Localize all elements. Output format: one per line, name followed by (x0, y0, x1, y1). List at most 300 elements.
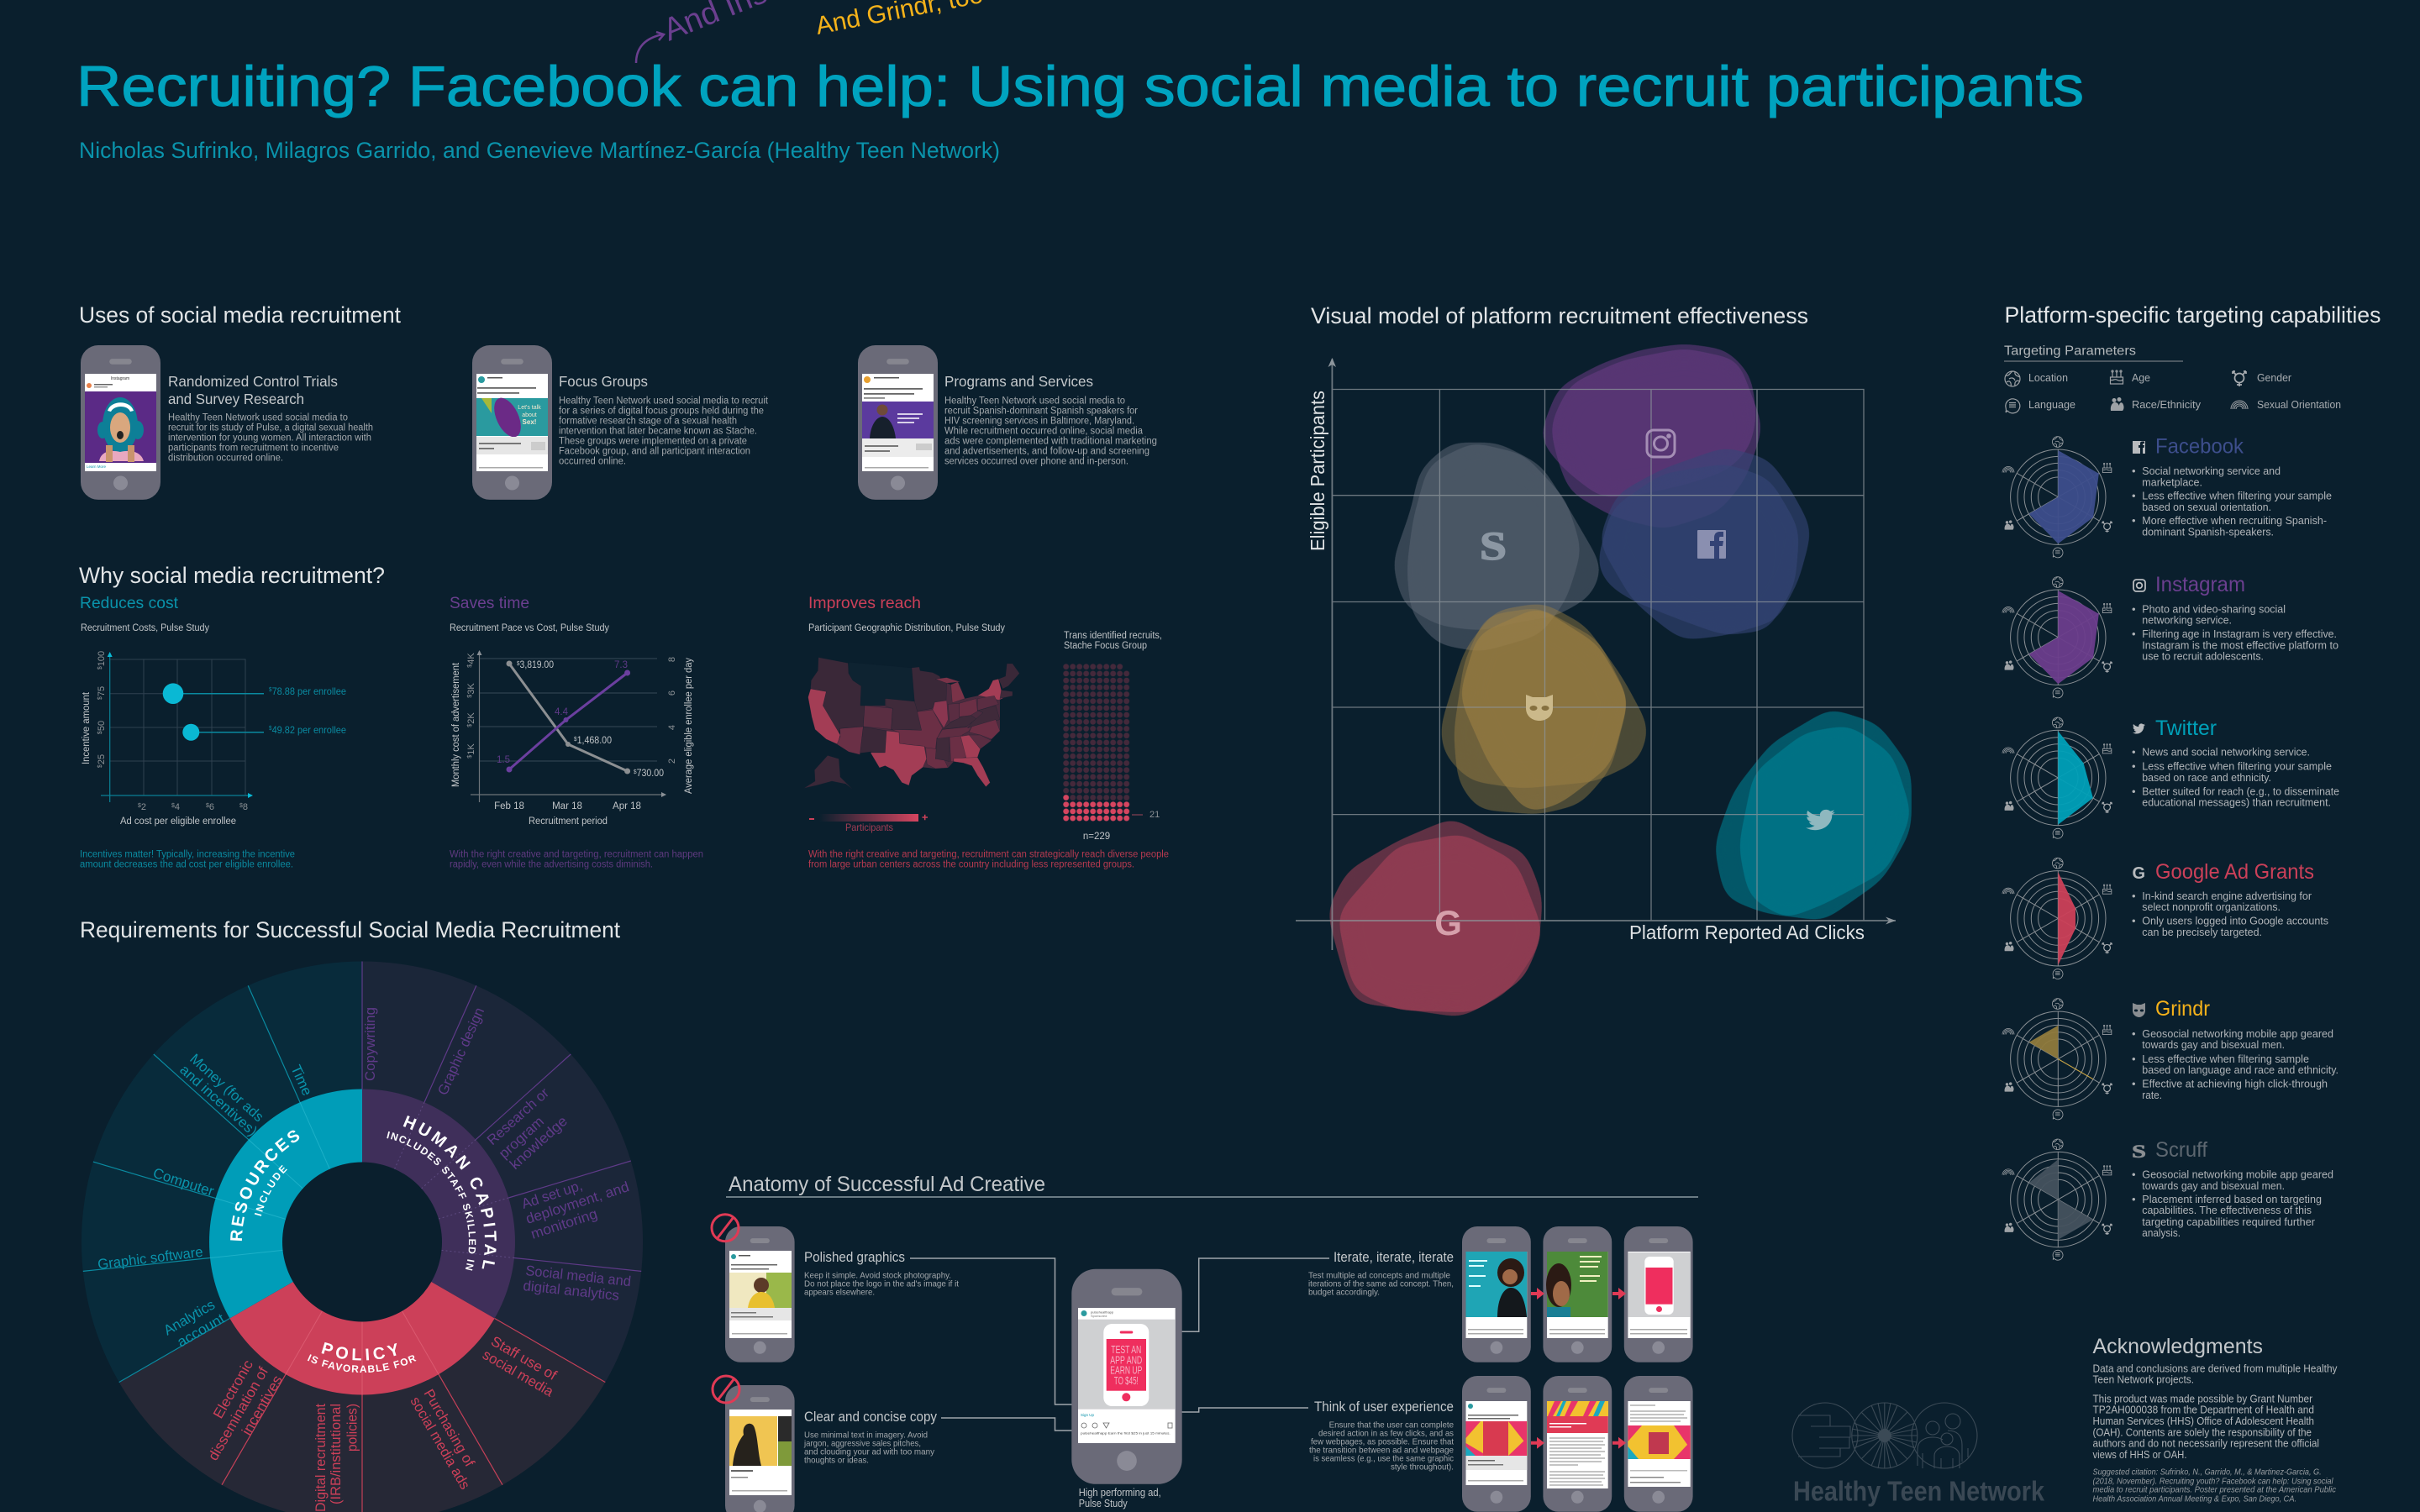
chart: recruitment costs scatter (81, 623, 346, 827)
phone: high performing ad: pulsehealthapp (1091, 1310, 1114, 1314)
heading: why: Why social media recruitment? (79, 563, 385, 588)
chart: recruitment costs scatter: $ (97, 764, 103, 768)
panel: visual model of platform recruitment effectiveness (1296, 303, 1903, 1008)
text: polished graphics (804, 1250, 959, 1298)
text: polished graphics: Keep it simple. Avoid stock photography. (804, 1271, 951, 1281)
sunburst chart (82, 961, 643, 1512)
text: grindr: • (2132, 1027, 2136, 1040)
chart: recruitment pace vs cost: $ (467, 755, 473, 759)
text: suggested citation (2092, 1467, 2337, 1504)
text: programs and services: ads were complemented with traditional marketing (944, 437, 1157, 447)
human capital segment labels: Research or (484, 1084, 552, 1148)
text: polished graphics: Polished graphics (804, 1250, 905, 1265)
text: iterate (1308, 1250, 1454, 1298)
text: instagram: Filtering age in Instagram is very effective. (2142, 627, 2337, 640)
text: grindr: rate. (2142, 1089, 2162, 1101)
text: facebook: Facebook (2155, 434, 2244, 458)
phone: randomized control trials (81, 345, 160, 500)
blob: facebook (1605, 457, 1803, 631)
text: clear and concise copy: Use minimal text in imagery. Avoid (804, 1431, 928, 1441)
chart: recruitment costs scatter: 8 (243, 802, 248, 812)
ring label: human capital: HUMAN CAPITAL (403, 1116, 497, 1268)
text: instagram (2132, 573, 2338, 663)
chart: recruitment pace vs cost: 730.00 (637, 769, 664, 779)
axis label: platform reported ad clicks: Platform Reported Ad Clicks (1629, 921, 1865, 943)
text: twitter: Twitter (2155, 717, 2217, 740)
text: think of user experience: style throughout). (1391, 1462, 1454, 1472)
axis arrowheads (1328, 358, 1896, 924)
panel: anatomy of successful ad creative (712, 1173, 1698, 1512)
human capital segment labels: Graphic design (434, 1005, 487, 1098)
human capital segment labels: program (496, 1113, 547, 1162)
text: scruff: Placement inferred based on targeting (2142, 1193, 2322, 1205)
text: facebook: marketplace. (2142, 475, 2202, 489)
text: grindr: Less effective when filtering sample (2142, 1053, 2309, 1065)
text: facebook: • (2132, 514, 2136, 527)
text: think of user experience (1309, 1399, 1454, 1472)
ad copy (1110, 1344, 1142, 1387)
text: scruff: • (2132, 1168, 2136, 1181)
handwritten note: Instagram (636, 0, 865, 63)
text: think of user experience: desired action in as few clicks, and as (1318, 1428, 1454, 1438)
chart: recruitment pace vs cost: Recruitment period (529, 816, 608, 827)
text: programs and services: recruit Spanish-dominant Spanish speakers for (944, 407, 1138, 417)
radar: twitter (2002, 717, 2112, 838)
resources segment labels: Analytics (161, 1297, 218, 1338)
text: grindr (2132, 997, 2338, 1101)
chart: recruitment costs scatter: $ (269, 687, 272, 693)
phones: user experience examples (1462, 1376, 1693, 1512)
chart grid and axes (1296, 359, 1896, 950)
text: grindr: • (2132, 1053, 2136, 1065)
text: grindr: towards gay and bisexual men. (2142, 1038, 2285, 1051)
radar: facebook (2002, 437, 2112, 558)
radar: instagram (2002, 577, 2112, 698)
chart: recruitment costs scatter: 2 (141, 802, 146, 812)
text: twitter: • (2132, 745, 2136, 758)
panel: requirements for successful social media recruitment (80, 917, 643, 1512)
chart: recruitment costs scatter: $ (97, 731, 103, 734)
chart: recruitment pace vs cost: $ (634, 769, 637, 775)
blob: twitter (1723, 718, 1903, 911)
text: twitter (2132, 717, 2339, 808)
text: twitter: educational messages) than recruitment. (2142, 795, 2331, 808)
ring label: human capital: INCLUDES STAFF SKILLED IN (387, 1131, 476, 1271)
arrows: iterate sequence (1531, 1288, 1626, 1299)
text: randomized control trials: distribution occurred online. (168, 454, 283, 464)
chart: recruitment pace vs cost: 6 (667, 690, 677, 696)
text: facebook: Less effective when filtering your sample (2142, 489, 2332, 502)
text: iterate: budget accordingly. (1308, 1288, 1380, 1298)
note: improves reach: With the right creative and targeting, recruitment can strategically reach diverse people (808, 850, 1169, 860)
resources segment labels: account (175, 1310, 228, 1350)
text: google ad grants: Google Ad Grants (2155, 860, 2314, 884)
blob: scruff (1401, 452, 1594, 643)
connector lines (910, 1258, 1329, 1431)
chart: recruitment pace vs cost: 2K (466, 712, 476, 724)
text: grindr: Effective at achieving high click-through (2142, 1077, 2328, 1090)
chart: recruitment costs scatter: Ad cost per eligible enrollee (120, 816, 236, 827)
panel: platform-specific targeting capabilities (2002, 302, 2381, 1260)
text: scruff: towards gay and bisexual men. (2142, 1179, 2285, 1192)
chart: recruitment costs scatter: $ (206, 803, 209, 809)
text: programs and services (944, 373, 1157, 467)
human capital segment labels: deployment, and (523, 1179, 631, 1227)
chart: recruitment costs scatter: 49.82 per enrollee (272, 724, 346, 736)
icon: grindr (1526, 695, 1553, 721)
text: google ad grants: can be precisely targeted. (2142, 926, 2262, 938)
chart: recruitment costs scatter: $ (171, 803, 175, 809)
blob: grindr (1449, 612, 1640, 805)
chart: recruitment pace vs cost: 1,468.00 (577, 736, 612, 746)
text: randomized control trials: intervention for young women. All interaction with (168, 433, 371, 444)
chart: recruitment pace vs cost: Feb 18 (494, 801, 524, 811)
text: twitter: based on race and ethnicity. (2142, 771, 2271, 784)
chart: recruitment pace vs cost: $ (467, 695, 473, 698)
text: scruff: analysis. (2142, 1226, 2181, 1239)
text: programs and services: Programs and Services (944, 373, 1093, 390)
heading: uses: Uses of social media recruitment (79, 302, 401, 328)
phones: iterate examples (1462, 1226, 1693, 1362)
note: saves time: rapidly, even while the advertising costs diminish. (450, 860, 653, 870)
text: scruff: Scruff (2155, 1138, 2207, 1162)
ring label: resources: INCLUDE (254, 1164, 287, 1216)
subheading: reduces cost: Reduces cost (80, 595, 179, 612)
chart: recruitment pace vs cost (450, 623, 694, 827)
title: Recruiting? Facebook can help: Using social media to recruit participants (76, 55, 2084, 118)
human capital segment labels: knowledge (507, 1113, 571, 1173)
text: twitter: • (2132, 759, 2136, 772)
chart: trans identified recruits dots: Stache Focus Group (1064, 641, 1147, 651)
logo: healthy teen network (1792, 1403, 2045, 1507)
text: programs and services: Healthy Teen Network used social media to (944, 396, 1125, 407)
text: facebook: based on sexual orientation. (2142, 501, 2271, 513)
text: scruff: Geosocial networking mobile app geared (2142, 1168, 2333, 1181)
resources segment labels: and incentives) (176, 1062, 260, 1139)
chart: recruitment costs scatter: 6 (209, 802, 214, 812)
text: grant disclaimer: (OAH). Contents are solely the responsibility of the (2092, 1425, 2312, 1438)
chart: recruitment pace vs cost: 2 (667, 759, 677, 764)
text: grant disclaimer: This product was made possible by Grant Number (2092, 1392, 2313, 1404)
text: data note (2092, 1362, 2338, 1386)
text: randomized control trials: participants from recruitment to incentive (168, 444, 339, 454)
text: programs and services: services occurred over phone and in-person. (944, 457, 1128, 467)
heading: requirements: Requirements for Successful Social Media Recruitment (80, 917, 620, 942)
resources segment labels: Computer (151, 1165, 216, 1200)
text: clear and concise copy (803, 1410, 938, 1466)
ad copy: TO $45! (1114, 1375, 1139, 1387)
radar: grindr (2002, 999, 2112, 1120)
text: polished graphics: appears elsewhere. (804, 1288, 875, 1298)
chart: recruitment pace vs cost: Monthly cost of advertisement (451, 662, 461, 787)
text: focus groups: intervention that later became known as Stache. (559, 427, 757, 437)
text: google ad grants: In-kind search engine advertising for (2142, 890, 2312, 902)
policy segment labels: (IRB/institutional (328, 1404, 344, 1504)
icon: instagram (1647, 430, 1675, 457)
text: clear and concise copy: thoughts or ideas. (804, 1456, 869, 1466)
chart: recruitment pace vs cost: Mar 18 (552, 801, 582, 811)
text: focus groups: for a series of digital focus groups held during the (559, 407, 764, 417)
text: facebook: • (2132, 465, 2136, 477)
text: focus groups: occurred online. (559, 457, 626, 467)
text: think of user experience: the transition between ad and webpage (1309, 1445, 1454, 1455)
text: randomized control trials: and Survey Research (168, 391, 304, 407)
phone: clear and concise copy example (725, 1385, 795, 1512)
text: scruff (2132, 1138, 2333, 1239)
phone: polished graphics example (725, 1226, 795, 1362)
chart: recruitment pace vs cost: $ (517, 661, 520, 667)
chart: participant geographic distribution map: Participant Geographic Distribution, Pulse Study (808, 623, 1005, 633)
text: suggested citation: media to recruit participants. Poster presented at the American Public (2092, 1485, 2337, 1495)
chart: trans identified recruits dots: n=229 (1083, 832, 1110, 842)
blob: instagram (1548, 353, 1754, 520)
caption: high performing ad: High performing ad, (1079, 1486, 1161, 1499)
heading: platform-specific: Platform-specific targeting capabilities (2005, 302, 2381, 328)
text: grant disclaimer: TP2AH000038 from the Department of Health and (2092, 1404, 2314, 1416)
text: twitter: Better suited for reach (e.g., to disseminate (2142, 785, 2339, 797)
text: google ad grants: • (2132, 915, 2136, 927)
arrows: user experience sequence (1531, 1437, 1626, 1449)
text: scruff: • (2132, 1193, 2136, 1205)
text: programs and services: While recruitment occurred online, social media (944, 427, 1144, 437)
phone: high performing ad: pulsehealthapp Earn the first $25 in just 15 minutes. (1081, 1431, 1171, 1435)
text: focus groups: These groups were implemented on a private (559, 437, 747, 447)
text: iterate: Iterate, iterate, iterate (1334, 1250, 1454, 1265)
heading: anatomy: Anatomy of Successful Ad Creative (729, 1173, 1045, 1196)
text: think of user experience: Think of user experience (1314, 1399, 1454, 1415)
phone: focus groups (472, 345, 552, 500)
chart: recruitment costs scatter: 78.88 per enrollee (272, 685, 346, 697)
human capital segment labels (362, 1005, 632, 1304)
phone: high performing ad: Sign Up (1081, 1413, 1095, 1417)
text: scruff: S (2132, 1141, 2146, 1162)
phone: focus groups: Let's talk (518, 405, 541, 411)
legend: targeting parameters: Age (2132, 372, 2150, 384)
text: facebook (2132, 434, 2332, 538)
text: think of user experience: few webpages, as possible. Ensure that (1311, 1436, 1454, 1446)
resources segment labels (97, 1051, 315, 1350)
text: randomized control trials: recruit for its study of Pulse, a digital sexual health (168, 423, 373, 433)
policy segment labels: incentives (239, 1373, 286, 1438)
note: saves time: With the right creative and targeting, recruitment can happen (450, 850, 703, 860)
text: google ad grants: G (2133, 864, 2145, 883)
subheading: improves reach: Improves reach (808, 595, 921, 612)
caption: high performing ad (1079, 1486, 1161, 1509)
chart: recruitment pace vs cost: 3,819.00 (520, 660, 554, 670)
ad copy: EARN UP (1110, 1365, 1142, 1377)
subheading: saves time: Saves time (450, 595, 529, 612)
heading: acknowledgments: Acknowledgments (2092, 1335, 2263, 1358)
chart: recruitment costs scatter: 50 (97, 721, 107, 731)
text: grant disclaimer: authors and do not necessarily represent the official (2092, 1437, 2319, 1450)
chart: recruitment pace vs cost: $ (467, 724, 473, 727)
text: google ad grants: • (2132, 890, 2136, 902)
human capital segment labels: digital analytics (523, 1278, 620, 1304)
human capital segment labels: Social media and (525, 1263, 632, 1289)
chart: recruitment costs scatter: 75 (97, 686, 107, 696)
text: instagram: Photo and video-sharing social (2142, 602, 2286, 615)
text: google ad grants (2132, 860, 2328, 938)
icon: facebook (1697, 530, 1726, 559)
legend: targeting parameters: Sexual Orientation (2257, 399, 2341, 411)
policy segment labels: social media (480, 1347, 556, 1400)
text: instagram: Instagram (2155, 573, 2245, 596)
text: twitter: News and social networking service. (2142, 745, 2310, 758)
policy segment labels (205, 1333, 560, 1512)
text: randomized control trials (168, 373, 373, 464)
icon: google: G (1434, 903, 1462, 942)
authors: Nicholas Sufrinko, Milagros Garrido, and Genevieve Martínez-García (Healthy Teen Network) (79, 138, 1000, 163)
chart: recruitment pace vs cost: 4K (466, 653, 476, 664)
text: focus groups: Focus Groups (559, 373, 648, 390)
text: grindr: based on language and race and ethnicity. (2142, 1063, 2338, 1076)
text: grant disclaimer (2092, 1392, 2319, 1461)
heading: visual model: Visual model of platform recruitment effectiveness (1311, 303, 1808, 328)
human capital segment labels: monitoring (529, 1205, 599, 1242)
phone: high performing ad: Sponsored (1091, 1314, 1107, 1318)
note: reduces cost: Incentives matter! Typically, increasing the incentive (80, 850, 295, 860)
text: google ad grants: select nonprofit organizations. (2142, 900, 2281, 913)
text: instagram: • (2132, 602, 2136, 615)
human capital segment labels: Ad set up, (519, 1178, 585, 1212)
text: grindr: Grindr (2155, 997, 2210, 1021)
chart: recruitment costs scatter: Recruitment Costs, Pulse Study (81, 623, 209, 633)
phone: focus groups: about (522, 412, 537, 418)
text: focus groups: Healthy Teen Network used social media to recruit (559, 396, 769, 407)
text: clear and concise copy: Clear and concise copy (804, 1410, 938, 1425)
note: saves time (450, 850, 703, 870)
text: suggested citation: (2018, November). Recruiting youth? Facebook can help: Using social (2092, 1476, 2333, 1486)
text: scruff: targeting capabilities required further (2142, 1215, 2316, 1228)
chart: trans identified recruits dots: 21 (1150, 810, 1160, 820)
ring label: policy (308, 1342, 417, 1373)
human capital segment labels: Copywriting (362, 1007, 378, 1081)
phone: randomized control trials: Learn More (87, 465, 107, 469)
ring label: resources: RESOURCES (230, 1131, 299, 1242)
panel: uses of social media recruitment (79, 302, 1157, 500)
policy segment labels: Purchasing of (421, 1386, 478, 1469)
text: data note: Teen Network projects. (2092, 1373, 2194, 1386)
chart: recruitment pace vs cost: $ (467, 664, 473, 668)
chart: recruitment pace vs cost: 4.4 (555, 707, 569, 717)
text: polished graphics: Do not place the logo in the ad's image if it (804, 1279, 959, 1289)
icon: prohibited sign 2 (713, 1376, 739, 1403)
chart: participant geographic distribution map: Participants (845, 822, 893, 833)
legend: targeting parameters: Location (2028, 372, 2068, 384)
text: facebook: • (2132, 489, 2136, 502)
chart: trans identified recruits dots: Trans identified recruits, (1064, 631, 1162, 641)
policy segment labels: Electronic (210, 1357, 256, 1421)
text: facebook: Social networking service and (2142, 465, 2281, 477)
text: programs and services: and advertisements, and follow-up and screening (944, 447, 1150, 457)
policy segment labels: Staff use of (488, 1333, 560, 1383)
chart: recruitment pace vs cost: Recruitment Pace vs Cost, Pulse Study (450, 623, 609, 633)
radar: scruff (2002, 1139, 2112, 1260)
chart: recruitment costs scatter: $ (269, 726, 272, 732)
resources segment labels: Time (287, 1063, 315, 1098)
chart: participant geographic distribution map (804, 623, 1019, 833)
text: grant disclaimer: views of HHS or OAH. (2092, 1448, 2186, 1461)
resources segment labels: Graphic software (97, 1244, 204, 1273)
legend: targeting parameters (2004, 344, 2341, 413)
phone: randomized control trials: Instagram (111, 376, 129, 381)
chart: recruitment pace vs cost: Apr 18 (613, 801, 641, 811)
panel: why social media recruitment (79, 563, 1169, 870)
chart: recruitment pace vs cost: 7.3 (614, 660, 628, 670)
text: clear and concise copy: and clouding your ad with too many (804, 1447, 935, 1457)
text: randomized control trials: Randomized Control Trials (168, 373, 338, 390)
text: instagram: networking service. (2142, 614, 2232, 627)
chart: recruitment pace vs cost: 4 (667, 725, 677, 730)
ad copy: TEST AN (1111, 1344, 1141, 1356)
text: instagram: • (2132, 627, 2136, 640)
text: iterate: iterations of the same ad concept. Then, (1308, 1279, 1454, 1289)
chart: recruitment pace vs cost: $ (574, 737, 577, 743)
icon: scruff: S (1480, 524, 1507, 569)
axis label: eligible participants: Eligible Participants (1307, 391, 1328, 551)
text: suggested citation: Health Association Annual Meeting & Expo, San Diego, CA. (2092, 1494, 2296, 1504)
chart: recruitment costs scatter: 4 (175, 802, 180, 812)
note: improves reach: from large urban centers across the country including less represented groups. (808, 860, 1134, 870)
logo: healthy teen network: Healthy Teen Network (1793, 1476, 2045, 1507)
text: twitter: • (2132, 785, 2136, 797)
radar: google ad grants (2002, 858, 2112, 979)
chart: recruitment costs scatter: $ (138, 803, 141, 809)
text: focus groups (559, 373, 769, 467)
phone: focus groups: Sex! (523, 418, 536, 426)
legend: targeting parameters: Targeting Parameters (2004, 344, 2136, 359)
text: focus groups: Facebook group, and all participant interaction (559, 447, 750, 457)
chart: recruitment pace vs cost: 3K (466, 683, 476, 695)
text: grant disclaimer: Human Services (HHS) Office of Adolescent Health (2092, 1415, 2314, 1427)
icon: twitter (1806, 810, 1835, 830)
text: focus groups: formative research stage of a sexual health (559, 417, 737, 427)
chart: recruitment costs scatter: $ (239, 803, 243, 809)
text: facebook: dominant Spanish-speakers. (2142, 526, 2274, 538)
resources segment labels: Money (for ads (187, 1051, 267, 1125)
legend: targeting parameters: Gender (2257, 372, 2291, 384)
phone: programs and services (858, 345, 938, 500)
note: reduces cost: amount decreases the ad cost per eligible enrollee. (80, 860, 293, 870)
panel: acknowledgments (2092, 1335, 2338, 1504)
text: think of user experience: is seamless (e.g., use the same graphic (1313, 1453, 1454, 1463)
blob: google (1335, 827, 1534, 1008)
chart: recruitment pace vs cost: 1.5 (497, 755, 510, 765)
chart: recruitment costs scatter: $ (97, 696, 103, 700)
text: randomized control trials: Healthy Teen Network used social media to (168, 413, 348, 423)
chart: recruitment pace vs cost: 1K (466, 743, 476, 755)
text: grindr: Geosocial networking mobile app geared (2142, 1027, 2333, 1040)
text: facebook: More effective when recruiting Spanish- (2142, 514, 2327, 527)
chart: recruitment costs scatter: 100 (97, 651, 107, 666)
text: instagram: use to recruit adolescents. (2142, 650, 2264, 663)
ring label: policy: POLICY (321, 1342, 397, 1361)
chart: recruitment pace vs cost: Average eligible enrollee per day (684, 658, 694, 794)
text: twitter: Less effective when filtering your sample (2142, 759, 2332, 772)
text: instagram: Instagram is the most effective platform to (2142, 638, 2338, 651)
text: programs and services: HIV screening services in Baltimore, Maryland. (944, 417, 1134, 427)
legend: targeting parameters: Race/Ethnicity (2132, 399, 2202, 411)
text: think of user experience: Ensure that the user can complete (1329, 1420, 1454, 1430)
note: reduces cost (80, 850, 295, 870)
phone: high performing ad (1071, 1269, 1182, 1484)
text: scruff: capabilities. The effectiveness of this (2142, 1204, 2312, 1216)
legend: targeting parameters: Language (2028, 399, 2075, 411)
text: clear and concise copy: jargon, aggressive sales pitches, (803, 1439, 921, 1449)
policy segment labels: Digital recruitment (313, 1404, 329, 1512)
chart: recruitment pace vs cost: 8 (667, 657, 677, 662)
note: improves reach (808, 850, 1169, 870)
